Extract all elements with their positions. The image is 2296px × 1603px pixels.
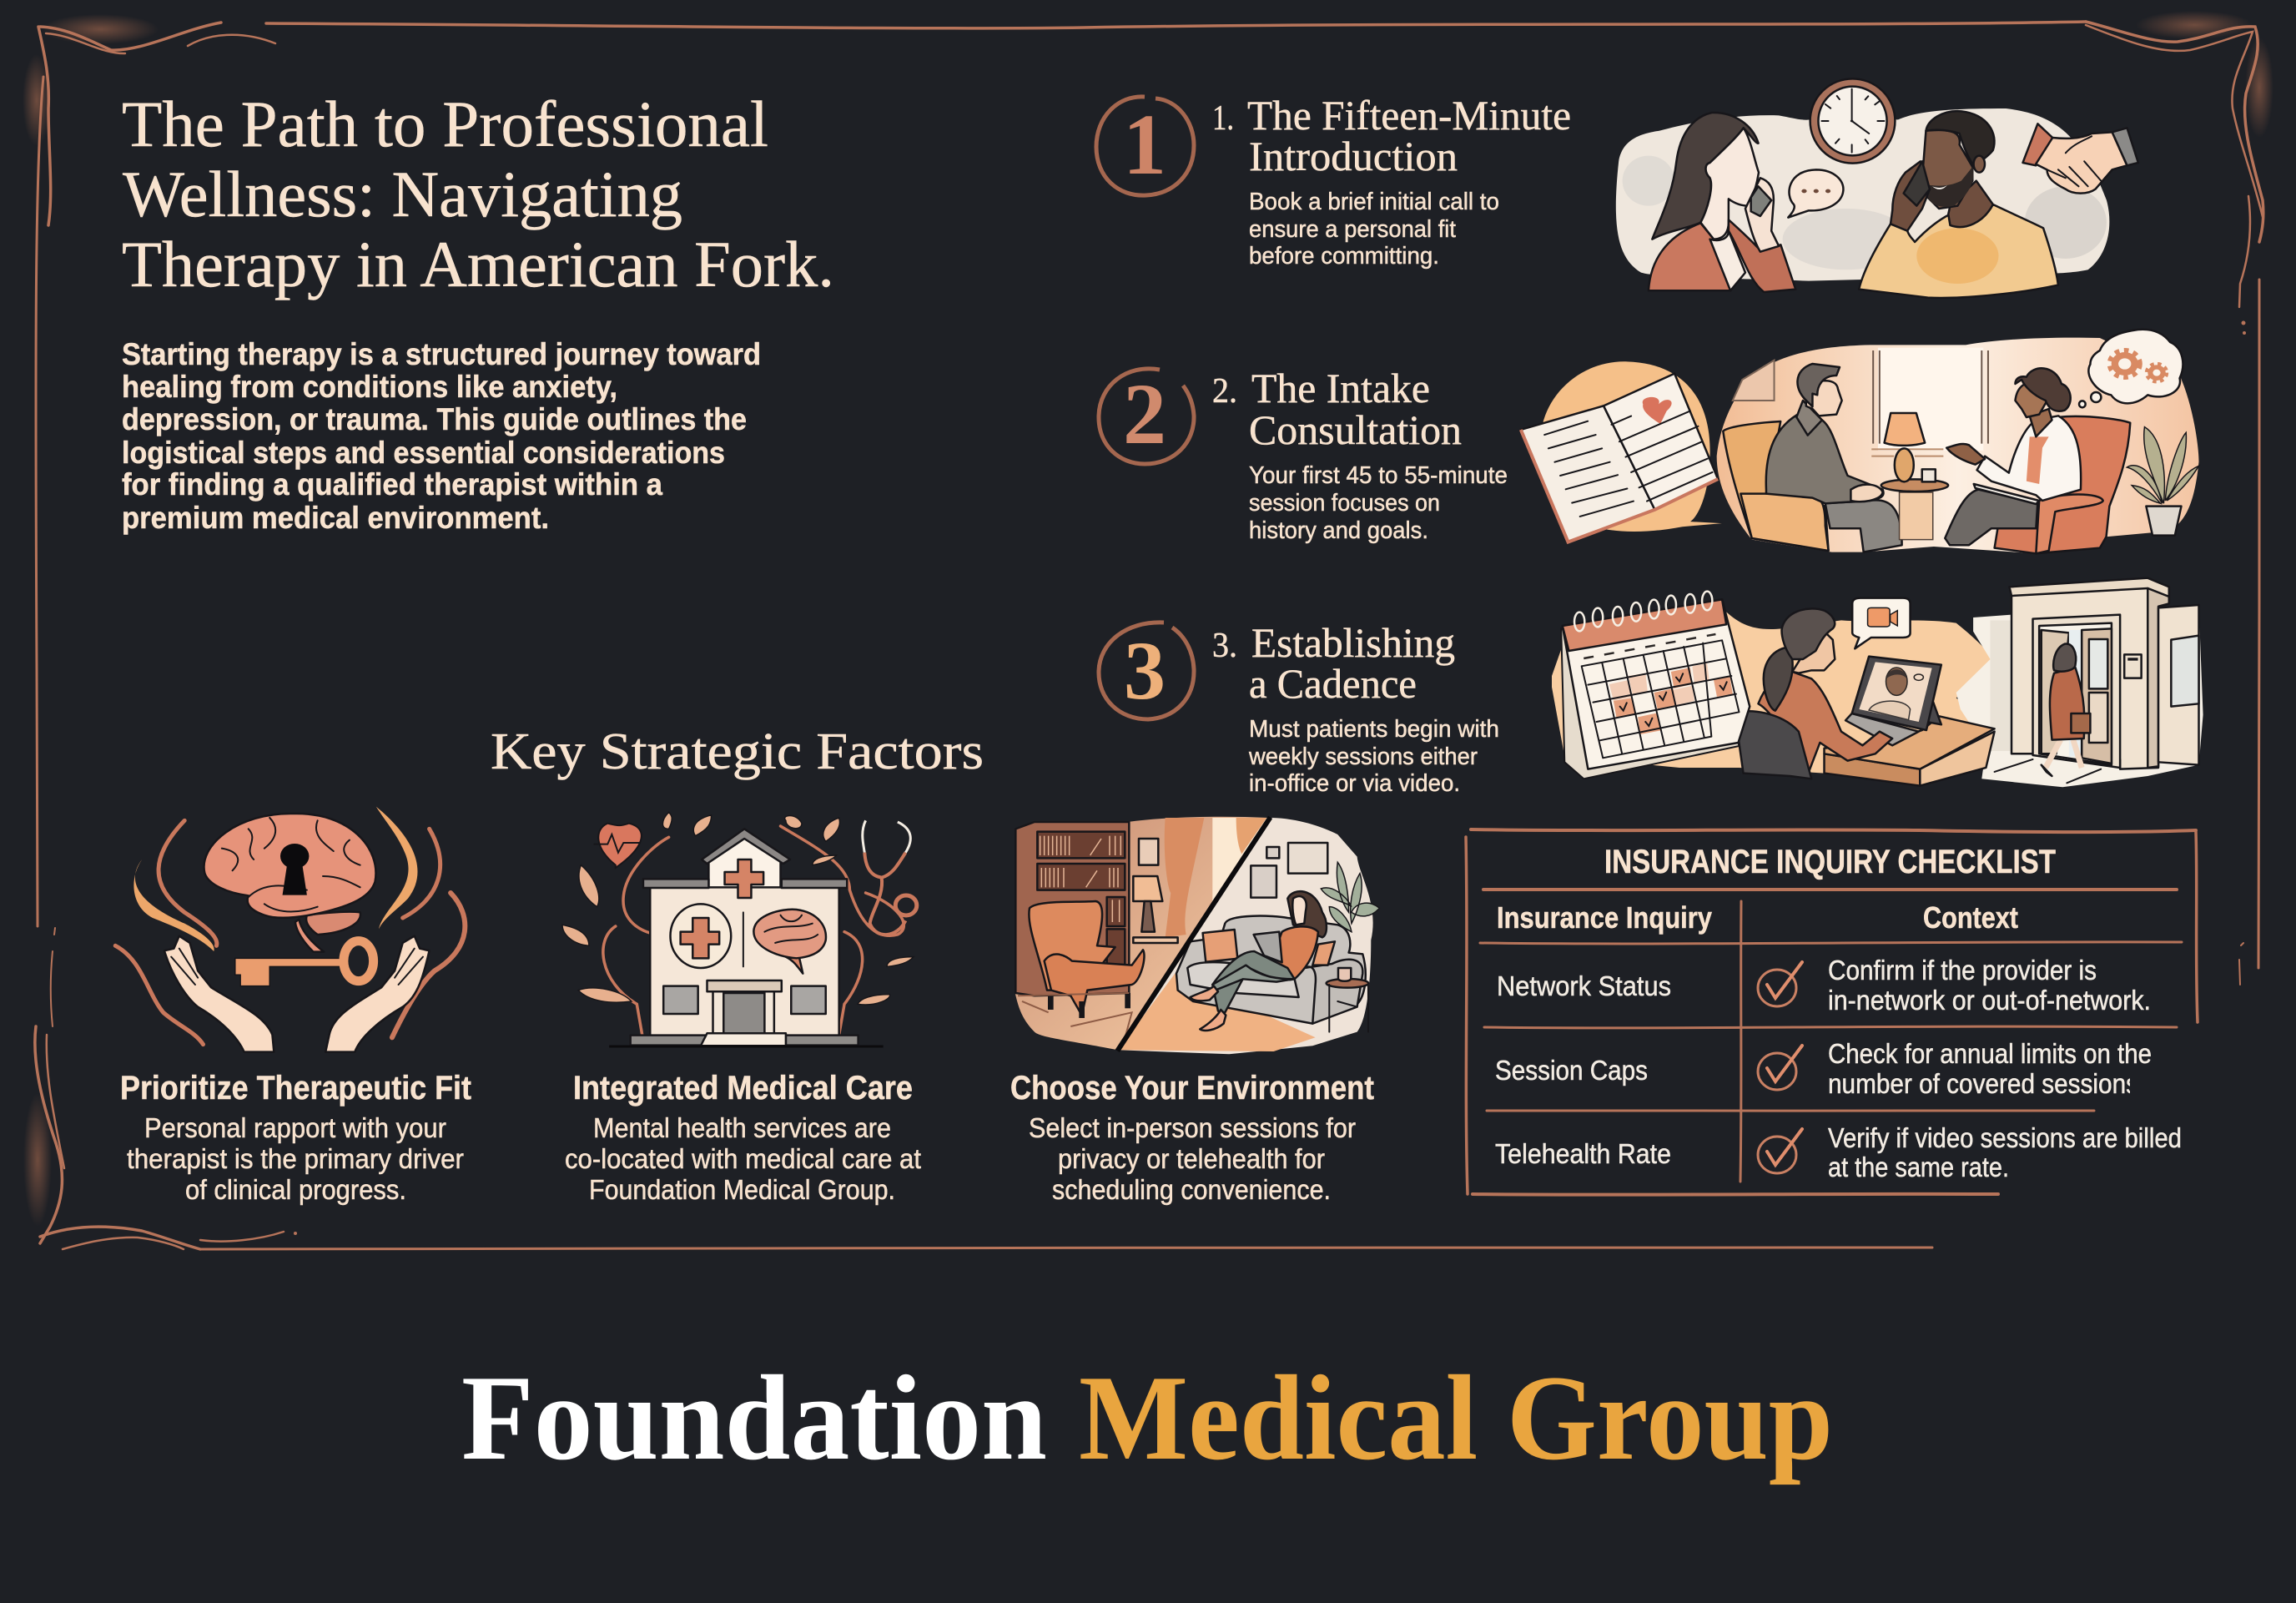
step 2 heading: Consultation — [1249, 406, 1462, 453]
step 2 text: session focuses on — [1249, 490, 1440, 517]
table headers: Insurance Inquiry — [1497, 900, 1712, 935]
row: session caps — [1495, 1038, 2152, 1099]
split line — [1117, 817, 1271, 1051]
factor 2 heading: Integrated Medical Care — [573, 1070, 913, 1106]
decorative frame — [23, 11, 2273, 1249]
home half — [1118, 818, 1379, 1054]
step 3 heading: a Cadence — [1249, 660, 1417, 707]
row: session caps: Check for annual limits on the — [1828, 1038, 2152, 1069]
factor 3: choose your environment — [1010, 817, 1379, 1205]
step 2 heading: The Intake — [1251, 365, 1430, 411]
intro paragraph: Starting therapy is a structured journey toward — [122, 337, 761, 371]
title: Therapy in American Fork. — [122, 228, 834, 300]
clock — [1810, 78, 1895, 164]
woman — [1649, 113, 1795, 292]
step 1 text — [1249, 189, 1499, 270]
table headers — [1497, 900, 2018, 935]
factor 2 text: Mental health services are — [593, 1112, 891, 1143]
step 3 text — [1248, 716, 1499, 797]
factor 3 text: privacy or telehealth for — [1058, 1143, 1325, 1174]
icon: brain, key and hands — [115, 807, 465, 1052]
clinician — [1945, 368, 2130, 553]
row: network status — [1497, 955, 2151, 1016]
illustration: open book — [1521, 361, 1722, 542]
client — [1723, 364, 1902, 552]
number badge 2: 2 — [1123, 366, 1166, 462]
title: The Path to Professional — [122, 88, 768, 160]
row: network status: Network Status — [1497, 970, 1671, 1001]
factor 2: integrated medical care — [562, 812, 921, 1205]
desk — [1825, 716, 1995, 786]
number badge 3 — [1099, 623, 1194, 719]
step 3 text: in-office or via video. — [1249, 770, 1460, 797]
icon: office and home split — [1015, 817, 1379, 1054]
step 1 heading: The Fifteen-Minute — [1247, 92, 1571, 139]
illustration: phone call — [1616, 78, 2138, 298]
number badge 2 — [1099, 366, 1194, 464]
step 2 text: history and goals. — [1249, 517, 1428, 544]
step 2 text — [1249, 462, 1508, 544]
speech bubble — [1788, 169, 1843, 218]
factor 1 text — [127, 1112, 464, 1205]
title: Wellness: Navigating — [123, 158, 682, 230]
footer brand: Medical Group — [1079, 1350, 1833, 1485]
intro paragraph: for finding a qualified therapist within a — [122, 467, 662, 502]
factor 3 text — [1029, 1112, 1356, 1205]
row: telehealth rate: Verify if video sessions are billed — [1828, 1122, 2182, 1153]
illustration: consultation room — [1717, 330, 2199, 553]
office half — [1015, 817, 1268, 1050]
row: telehealth rate: Telehealth Rate — [1495, 1138, 1671, 1169]
step 3 heading — [1212, 619, 1455, 707]
intro paragraph — [122, 337, 761, 535]
factor 3 text: scheduling convenience. — [1052, 1174, 1331, 1205]
tablet call — [1845, 657, 1941, 745]
step 3 text: weekly sessions either — [1248, 744, 1478, 770]
row: network status: Confirm if the provider is — [1828, 955, 2097, 985]
footer brand — [461, 1350, 1833, 1485]
intro paragraph: premium medical environment. — [122, 501, 549, 535]
step 2 heading: 2. — [1212, 372, 1237, 411]
step 3 heading: Establishing — [1251, 619, 1455, 666]
step 2 heading — [1212, 365, 1462, 453]
handshake — [2023, 124, 2138, 194]
step 1 heading: 1. — [1212, 99, 1234, 138]
intro paragraph: logistical steps and essential considerations — [122, 436, 725, 470]
clinic entrance — [1956, 578, 2203, 787]
factor 3 heading: Choose Your Environment — [1010, 1070, 1374, 1106]
step 1 heading — [1212, 92, 1571, 179]
factor 1 text: therapist is the primary driver — [127, 1143, 464, 1174]
row: network status: in-network or out-of-network. — [1828, 985, 2151, 1016]
step 1 heading: Introduction — [1249, 133, 1458, 179]
factor 2 text: Foundation Medical Group. — [589, 1174, 895, 1205]
number badge 3: 3 — [1124, 624, 1166, 717]
row: telehealth rate: at the same rate. — [1828, 1152, 2009, 1182]
step 1 text: ensure a personal fit — [1249, 216, 1456, 243]
illustration: cadence — [1552, 578, 2203, 787]
intro paragraph: healing from conditions like anxiety, — [122, 370, 617, 404]
step 1 text: before committing. — [1249, 243, 1439, 270]
row: session caps: number of covered sessions — [1828, 1068, 2138, 1099]
step 2 text: Your first 45 to 55-minute — [1249, 462, 1508, 489]
man — [1859, 111, 2058, 298]
number badge 1 — [1096, 97, 1194, 195]
icon: clinic building — [562, 812, 917, 1046]
title — [122, 88, 834, 300]
icon: check 1 — [1758, 962, 1802, 1006]
woman at desk — [1735, 608, 1892, 779]
number badge 1: 1 — [1123, 97, 1166, 193]
table headers: Context — [1923, 900, 2018, 935]
lamp and side table — [1881, 413, 1948, 540]
factor 1: therapeutic fit — [115, 807, 471, 1205]
step 3 text: Must patients begin with — [1249, 716, 1499, 743]
icon: check 2 — [1758, 1046, 1802, 1090]
heading: key strategic factors: Key Strategic Factors — [491, 723, 984, 780]
thought cloud with gears — [2079, 330, 2183, 407]
factor 1 text: Personal rapport with your — [144, 1112, 446, 1143]
table rules — [1466, 829, 2198, 1195]
panel: insurance checklist table — [1466, 829, 2198, 1195]
footer brand: Foundation — [461, 1350, 1047, 1485]
step 3 heading: 3. — [1212, 627, 1237, 665]
plant — [2127, 427, 2199, 536]
factor 1 text: of clinical progress. — [185, 1174, 406, 1205]
step 3 — [1099, 578, 2203, 797]
table title: INSURANCE INQUIRY CHECKLIST — [1604, 844, 2056, 880]
factor 1 heading: Prioritize Therapeutic Fit — [120, 1070, 471, 1106]
video bubble — [1852, 598, 1911, 648]
wall calendar — [1561, 592, 1750, 779]
factor 2 text — [565, 1112, 921, 1205]
row: telehealth rate — [1495, 1122, 2182, 1182]
icon: check 3 — [1758, 1129, 1802, 1173]
step 2 — [1099, 330, 2199, 553]
step 1 — [1096, 78, 2138, 298]
factor 2 text: co-located with medical care at — [565, 1143, 921, 1174]
row: session caps: Session Caps — [1495, 1055, 1648, 1086]
factor 3 text: Select in-person sessions for — [1029, 1112, 1356, 1143]
step 1 text: Book a brief initial call to — [1249, 189, 1499, 215]
intro paragraph: depression, or trauma. This guide outlines the — [122, 402, 747, 436]
